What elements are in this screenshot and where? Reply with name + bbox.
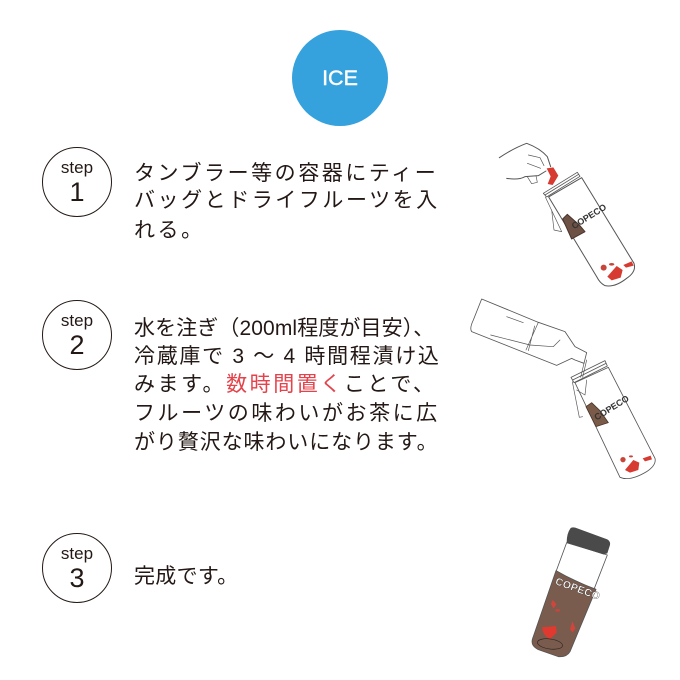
- step 1 badge: 1: [69, 177, 85, 207]
- step 1 text: れる。: [134, 219, 205, 242]
- step 2 text: がり贅沢な味わいになります。: [134, 431, 438, 454]
- step 3 text: 完成です。: [134, 565, 238, 588]
- step 1 text: タンブラー等の容器にティー: [134, 162, 438, 185]
- step 1 text: バッグとドライフルーツを入: [134, 189, 440, 212]
- step 2 text: 水を注ぎ（200ml程度が目安）、: [134, 317, 434, 340]
- step 1 badge: [42, 147, 112, 217]
- step 2 text: [134, 317, 441, 454]
- illustration: hand dropping fruit into tumbler: COPECO: [570, 202, 608, 231]
- step 2 badge: 2: [69, 330, 85, 360]
- step 1 badge: step: [61, 158, 93, 177]
- step 2 text: フルーツの味わいがお茶に広: [134, 402, 440, 425]
- illustration: finished iced tea tumbler: COPECO: [554, 576, 601, 603]
- step 1 text: [134, 162, 440, 242]
- step 2 badge: step: [61, 311, 93, 330]
- illustration: finished iced tea tumbler: [532, 527, 610, 657]
- step 3 badge: 3: [69, 563, 85, 593]
- title badge: ICE: [292, 30, 388, 126]
- illustration: pouring water from bottle into tumbler: [471, 299, 655, 479]
- step 2 badge: [42, 300, 112, 370]
- step 3 badge: step: [61, 544, 93, 563]
- step 3 badge: [42, 533, 112, 603]
- step 2 text: みます。数時間置くことで、: [134, 373, 437, 396]
- illustration: pouring water from bottle into tumbler: COPECO: [592, 393, 631, 422]
- title badge: ICE: ICE: [322, 66, 358, 90]
- illustration: hand dropping fruit into tumbler: [499, 143, 635, 286]
- step 2 text: 冷蔵庫で 3 ～ 4 時間程漬け込: [134, 345, 441, 368]
